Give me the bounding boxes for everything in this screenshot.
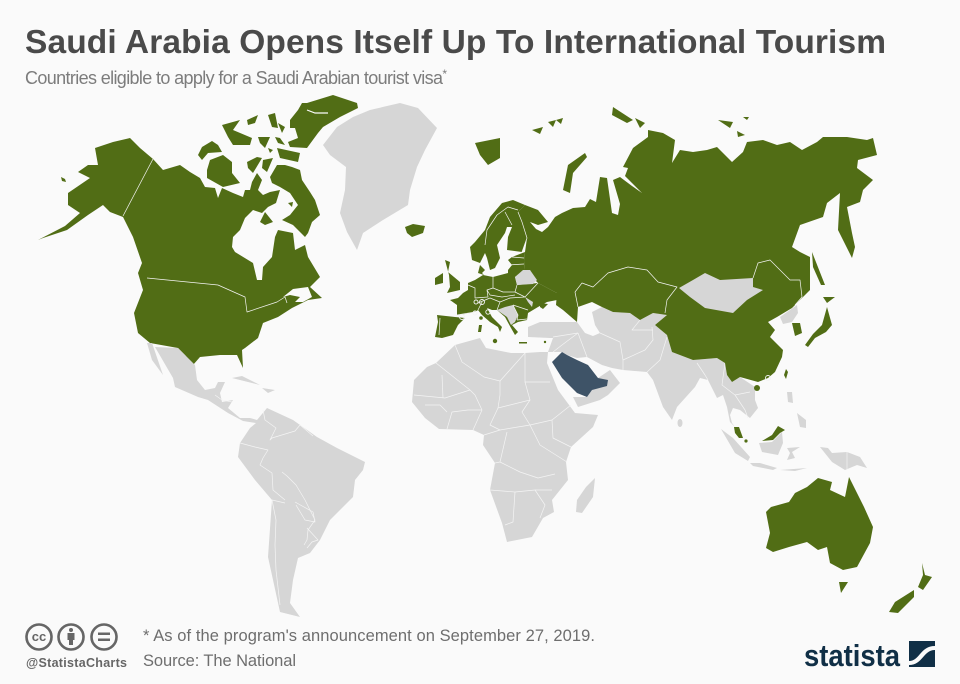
footnote: * As of the program's announcement on September 27, 2019. <box>143 627 595 645</box>
region: Oceania <box>766 477 932 613</box>
handle: @StatistaCharts <box>26 656 127 670</box>
borders: Latin America <box>215 395 318 605</box>
water: Ellesmere fjords <box>307 110 328 113</box>
licence icons <box>26 624 116 650</box>
region: Latin America <box>147 343 365 617</box>
region: Middle East, South and South-East Asia <box>528 305 867 471</box>
borders: Europe and Eurasia <box>439 207 802 335</box>
region: Africa <box>412 338 598 542</box>
region: Mongolia <box>679 273 763 313</box>
region: Moldova <box>525 297 533 307</box>
region: eligible North America <box>38 95 358 368</box>
region: Balkans <box>497 305 518 325</box>
borders: Africa <box>414 345 571 525</box>
region: Saudi Arabia <box>552 352 608 397</box>
subtitle: Countries eligible to apply for a Saudi Arabian tourist visa <box>25 68 443 88</box>
region: Greenland <box>323 103 437 250</box>
world map <box>38 95 932 617</box>
borders: Canada, USA, Alaska <box>123 159 287 312</box>
licence icons: cc <box>32 629 46 644</box>
title: Saudi Arabia Opens Itself Up To International Tourism <box>25 24 886 61</box>
subtitle: * <box>442 67 447 81</box>
microstates markers <box>460 300 770 380</box>
region: eligible Eurasia <box>405 107 877 443</box>
borders: Asia <box>553 320 847 470</box>
source: Source: The National <box>143 652 296 670</box>
region: Madagascar <box>576 478 595 513</box>
water: Gulf of St Lawrence <box>283 287 312 302</box>
region: Belarus <box>515 270 537 285</box>
statista logo: statista <box>804 638 901 673</box>
